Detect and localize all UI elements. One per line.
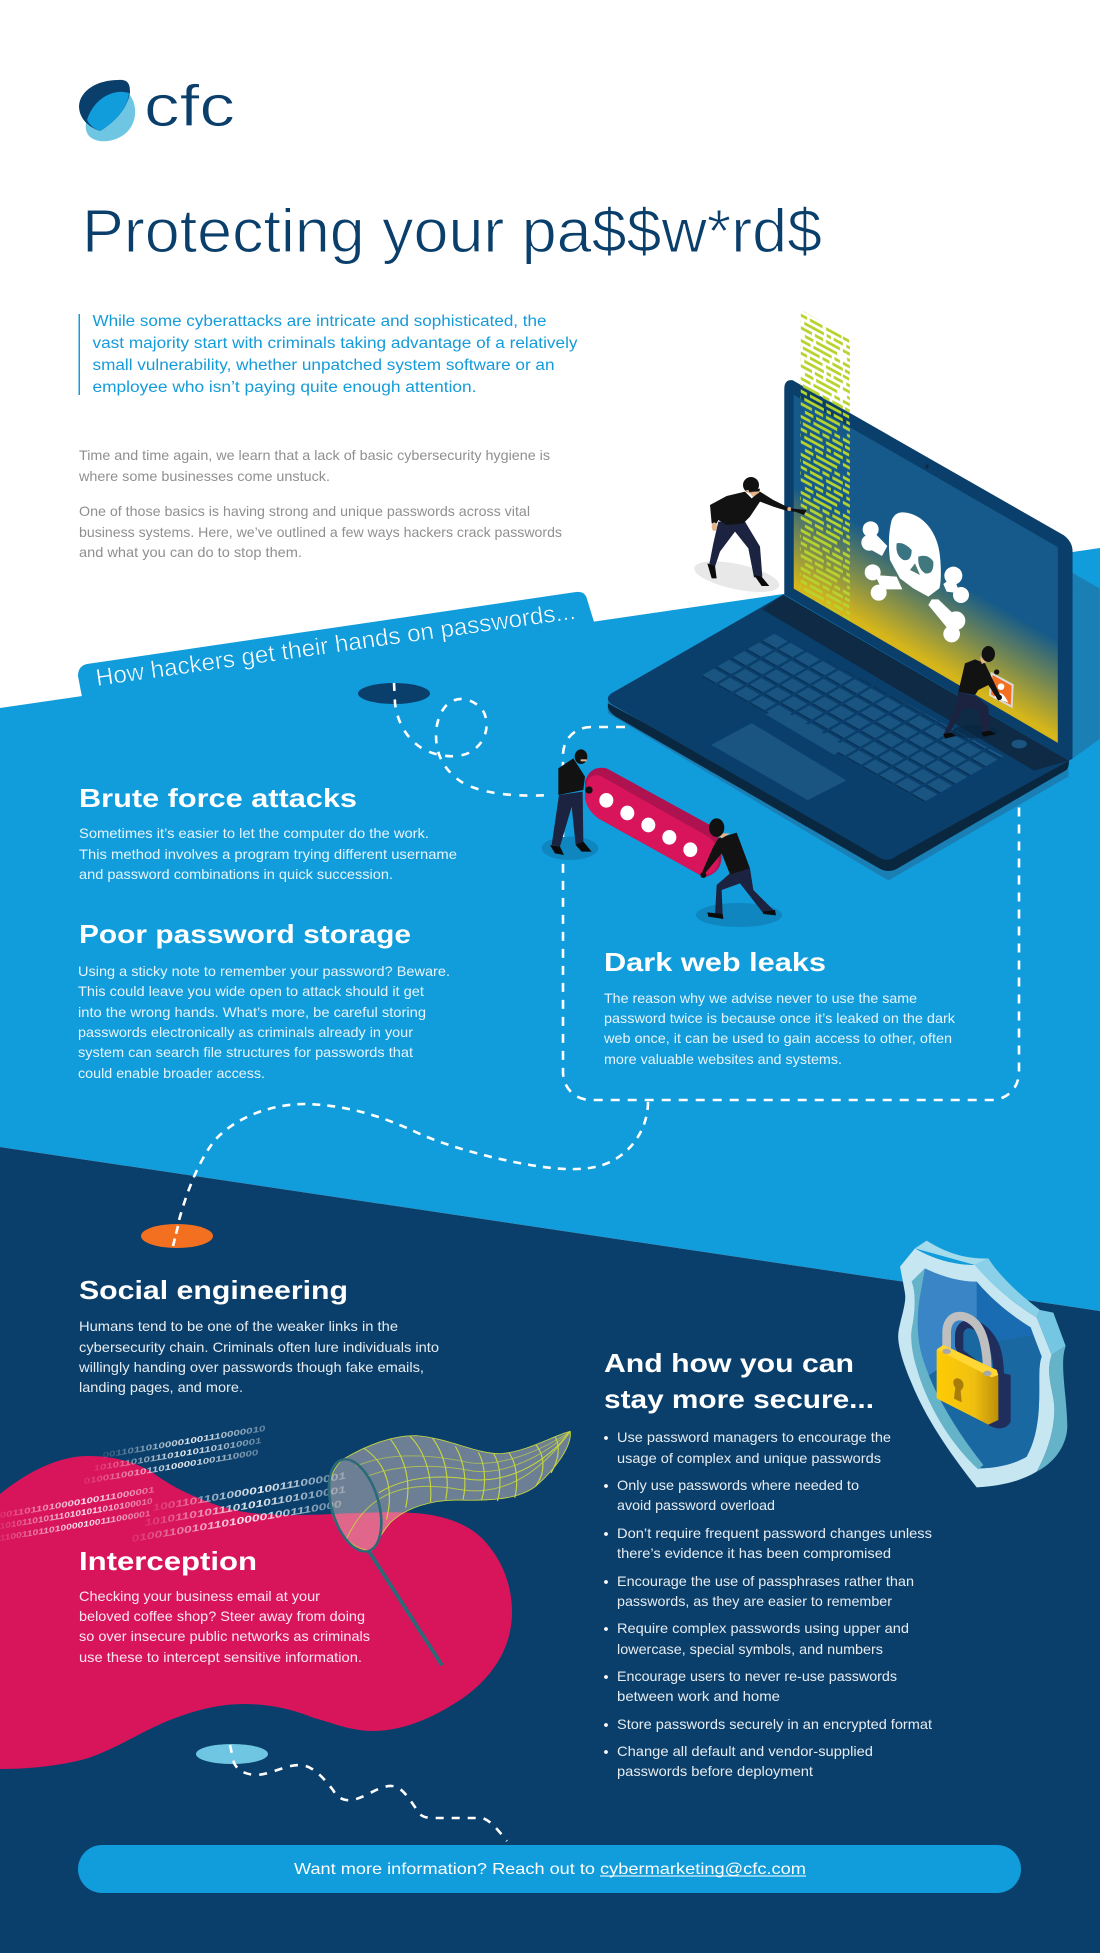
intro body text: One of those basics is having strong and unique passwords across vital (79, 503, 530, 519)
intro callout: employee who isn’t paying quite enough attention. (92, 379, 476, 396)
heading: stay secure: And how you can (604, 1348, 854, 1378)
text: poor storage body: system can search file structures for passwords that (78, 1044, 413, 1060)
net grid lines (346, 1431, 570, 1539)
bullet list: security tips: passwords before deployment (617, 1763, 813, 1779)
panel: blue band (0, 548, 1100, 1311)
intro callout (78, 313, 578, 396)
heading: stay secure (604, 1348, 874, 1414)
password pill (585, 768, 722, 877)
bullet list: security tips: passwords, as they are easier to remember (617, 1593, 892, 1609)
binary data stream: 00110110100001001110000010 (102, 1424, 267, 1460)
footer call to action (78, 1845, 1021, 1893)
net mesh body (329, 1431, 570, 1551)
oval: light blue start (196, 1744, 268, 1764)
bullet list: security tips: Encourage users to never re-use passwords (617, 1668, 897, 1684)
text: social engineering body: landing pages, and more. (79, 1379, 243, 1395)
bullet list: security tips: Only use passwords where needed to (617, 1477, 859, 1493)
bullet list: security tips: lowercase, special symbols, and numbers (617, 1641, 883, 1657)
binary data stream: 0011011010000100111000001 (0, 1485, 156, 1520)
keyboard (699, 632, 1004, 804)
power button (1012, 740, 1027, 748)
text: social engineering body (78, 1318, 439, 1395)
intro body text (78, 447, 562, 560)
heading: interception: Interception (79, 1546, 257, 1576)
heading: brute force: Brute force attacks (79, 783, 357, 813)
text: dark web body: more valuable websites and systems. (604, 1051, 842, 1067)
webcam (925, 464, 929, 468)
arrow: dash over orange oval (173, 1226, 178, 1246)
binary data stream: 0100110010110100001001110000 (83, 1448, 260, 1486)
text: poor storage body: passwords electronically as criminals already in your (78, 1024, 413, 1040)
text: brute force body: This method involves a program trying different username (79, 846, 457, 862)
arrow: dashed rounded frame around dark web leaks (563, 727, 1019, 1100)
intro callout: While some cyberattacks are intricate and sophisticated, the (92, 313, 546, 330)
logo: cfc (144, 74, 235, 139)
binary data stream (0, 1424, 347, 1545)
heading: social engineering: Social engineering (79, 1275, 348, 1305)
intro body text: business systems. Here, we’ve outlined a few ways hackers crack passwords (79, 524, 562, 540)
oval: orange landing (141, 1224, 213, 1248)
bullet list: security tips: Use password managers to encourage the (617, 1429, 891, 1445)
intro body text: and what you can do to stop them. (79, 544, 302, 560)
text: interception body (79, 1588, 370, 1665)
text: social engineering body: cybersecurity chain. Criminals often lure individuals into (79, 1339, 439, 1355)
net hoop (320, 1455, 390, 1556)
crimson blob (0, 1456, 512, 1769)
bullet list: security tips: Encourage the use of passphrases rather than (617, 1573, 914, 1589)
screen (794, 395, 1058, 743)
bullet list: security tips: usage of complex and unique passwords (617, 1450, 881, 1466)
text: poor storage body: could enable broader access. (78, 1065, 265, 1081)
hacker: right pill pusher shadow (696, 903, 782, 927)
bullet list: security tips: Store passwords securely in an encrypted format (617, 1716, 932, 1732)
hacker: pointing at screen (692, 477, 807, 598)
binary data stream: 101011010111010101101010001 (93, 1436, 263, 1473)
section tab: how hackers: How hackers get their hands on passwords... (94, 598, 577, 692)
hacker: carrying badge (943, 646, 1013, 739)
bullet list: security tips: between work and home (617, 1688, 780, 1704)
oval: navy start (358, 683, 430, 704)
binary data stream: 110011011010000100111000001 (0, 1509, 152, 1543)
hacker: right pill pusher (700, 818, 776, 919)
bullet list: security tips: Change all default and vendor-supplied (617, 1743, 873, 1759)
text: poor storage body (78, 963, 450, 1081)
text: social engineering body: Humans tend to be one of the weaker links in the (79, 1318, 398, 1334)
text: brute force body: Sometimes it’s easier to let the computer do the work. (79, 825, 429, 841)
bullet list: security tips: Require complex passwords using upper and (617, 1620, 909, 1636)
green code stream (800, 310, 850, 620)
illustration: catching net (320, 1431, 570, 1665)
screen lid (784, 380, 1073, 761)
binary data stream: 101011010111010101101010001 (144, 1484, 347, 1529)
bullet list: security tips (604, 1429, 932, 1779)
bullet list: security tips: Don’t require frequent password changes unless (617, 1525, 932, 1541)
bullet list: security tips: there’s evidence it has been compromised (617, 1545, 891, 1561)
net handle (369, 1552, 442, 1665)
heading: poor password storage: Poor password storage (79, 919, 411, 949)
text: poor storage body: This could leave you wide open to attack should it get (78, 983, 424, 999)
text: poor storage body: into the wrong hands. What’s more, be careful storing (78, 1004, 426, 1020)
title: Protecting your pa$$w*rd$ (82, 197, 822, 265)
bullet list: security tips: avoid password overload (617, 1497, 775, 1513)
illustration: skull and crossbones (861, 512, 969, 642)
text: dark web body: web once, it can be used to gain access to other, often (603, 1030, 952, 1046)
text: interception body: beloved coffee shop? Steer away from doing (79, 1608, 365, 1624)
intro body text: Time and time again, we learn that a lack of basic cybersecurity hygiene is (79, 447, 550, 463)
footer call to action: Want more information? Reach out to (294, 1861, 595, 1878)
text: dark web body: password twice is because once it’s leaked on the dark (604, 1010, 956, 1026)
binary data stream: 0100110010110100001001110000 (131, 1499, 344, 1545)
heading: stay secure: stay more secure... (604, 1384, 874, 1414)
arrow: dashed loop path (394, 683, 552, 796)
text: dark web body (603, 990, 956, 1067)
arrow: dashed wave to orange oval (173, 1102, 648, 1246)
heading: dark web leaks: Dark web leaks (604, 947, 826, 977)
intro callout: vast majority start with criminals taking advantage of a relatively (92, 335, 578, 352)
laptop deck (608, 595, 1069, 860)
text: social engineering body: willingly handing over passwords though fake emails, (78, 1359, 424, 1375)
text: interception body: use these to intercept sensitive information. (79, 1649, 362, 1665)
binary data stream: 1010110101110101011010100010 (0, 1496, 154, 1531)
text: interception body: so over insecure public networks as criminals (79, 1628, 370, 1644)
binary data stream: 10011011010000100111000001 (152, 1471, 347, 1514)
illustration: laptop (608, 310, 1100, 880)
logo (79, 74, 235, 141)
text: brute force body (79, 825, 457, 882)
text: brute force body: and password combinations in quick succession. (79, 866, 393, 882)
text: interception body: Checking your business email at your (79, 1588, 320, 1604)
spacebar (766, 707, 846, 755)
laptop base side (608, 703, 1069, 871)
hacker: left pill pusher (542, 749, 598, 860)
footer call to action: cybermarketing@cfc.com (600, 1861, 806, 1878)
arrow: dashed path to footer (230, 1745, 507, 1841)
icon: shield with padlock (898, 1241, 1067, 1487)
laptop shadows (608, 573, 1100, 880)
panel: navy lower section (0, 1147, 1100, 1953)
intro body text: where some businesses come unstuck. (78, 468, 330, 484)
text: dark web body: The reason why we advise never to use the same (604, 990, 917, 1006)
hinge (762, 595, 1069, 771)
trackpad (711, 723, 846, 800)
intro callout: small vulnerability, whether unpatched system software or an (92, 357, 554, 374)
text: poor storage body: Using a sticky note to remember your password? Beware. (78, 963, 450, 979)
